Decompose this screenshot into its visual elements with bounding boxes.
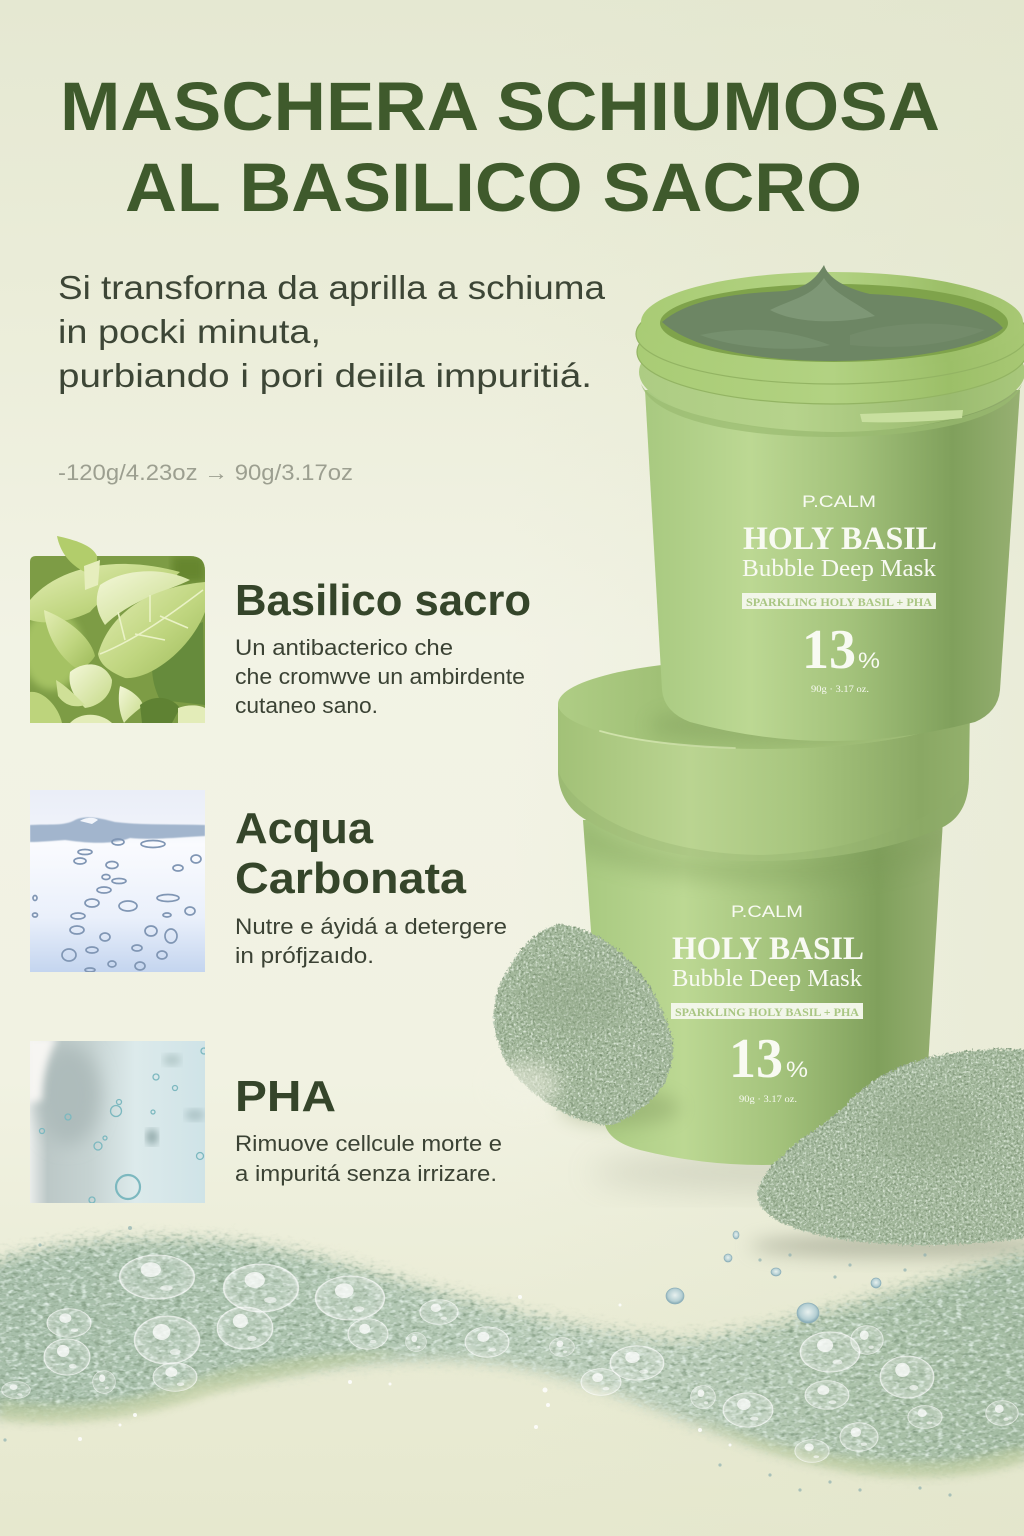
- collar highlight: [860, 410, 963, 422]
- bottom jar body: [583, 820, 943, 1165]
- description: Basilico sacro: [235, 635, 525, 718]
- title: [60, 68, 940, 226]
- heading: Basilico sacro: Basilico sacro: [235, 576, 531, 625]
- right foam pile: [758, 1049, 1024, 1245]
- weight note: -120g/4.23oz → 90g/3.17oz: [58, 460, 353, 485]
- bottom jar label: P.CALM: [731, 902, 803, 921]
- bottom jar label: %: [786, 1057, 808, 1082]
- top jar: [636, 265, 1024, 741]
- shadow under bottom jar: [590, 1156, 950, 1188]
- thumbnail: PHA texture: [25, 1036, 207, 1203]
- top jar label: [742, 492, 937, 695]
- top jar collar: [639, 312, 1024, 432]
- description: Basilico sacro: che cromwve un ambirdente: [235, 664, 525, 689]
- left foam blob: [491, 924, 673, 1125]
- thumbnail: holy basil leaves: [22, 536, 205, 723]
- description: Acqua Carbonata: Nutre e áyidá a detergere: [235, 914, 507, 939]
- description: PHA: a impuritá senza irrizare.: [235, 1161, 497, 1186]
- heading: Acqua Carbonata: Acqua: [235, 804, 374, 853]
- description: PHA: [235, 1131, 502, 1186]
- bottom jar: [558, 659, 970, 1165]
- thumbnail: carbonated water: [30, 790, 205, 972]
- bottom jar label: Bubble Deep Mask: [672, 966, 862, 992]
- description: Basilico sacro: Un antibacterico che: [235, 635, 453, 660]
- top jar body: [645, 390, 1020, 741]
- foam droplets: [78, 1295, 732, 1446]
- bottom jar label: HOLY BASIL: [672, 931, 864, 967]
- description: Acqua Carbonata: in prófjzaıdo.: [235, 943, 374, 968]
- subtitle: [58, 269, 606, 394]
- yellow-green foam underside: [0, 1352, 1024, 1477]
- description: Basilico sacro: cutaneo sano.: [235, 693, 378, 718]
- bottom jar label: 90g · 3.17 oz.: [739, 1095, 797, 1105]
- mask cream: [662, 265, 1003, 361]
- large bubbles: [2, 1255, 1018, 1463]
- bottom jar label: SPARKLING HOLY BASIL + PHA: [675, 1005, 859, 1019]
- water drops: [666, 1231, 881, 1323]
- top jar label: 90g · 3.17 oz.: [811, 685, 869, 695]
- top jar label: SPARKLING HOLY BASIL + PHA: [746, 595, 932, 609]
- shadow of top jar on lid: [660, 714, 914, 748]
- heading: PHA: PHA: [235, 1072, 336, 1121]
- title: AL BASILICO SACRO: [125, 149, 862, 226]
- top jar label: %: [858, 648, 880, 673]
- top jar inner wall: [660, 284, 1008, 362]
- description: Acqua Carbonata: [235, 914, 507, 968]
- top jar label: Bubble Deep Mask: [742, 556, 936, 582]
- top jar label: P.CALM: [802, 492, 876, 511]
- subtitle: purbiando i pori deiila impuritiá.: [58, 357, 592, 394]
- bottom jar label: [671, 902, 864, 1105]
- subtitle: Si transforna da aprilla a schiuma: [58, 269, 606, 306]
- top jar label: 13: [802, 619, 856, 681]
- top jar thread rings: [637, 300, 1024, 404]
- description: PHA: Rimuove cellcule morte e: [235, 1131, 502, 1156]
- heading: Acqua Carbonata: [235, 804, 467, 903]
- shadow under right foam: [750, 1234, 1024, 1258]
- bottom jar label: 13: [729, 1028, 783, 1090]
- top jar rim: [641, 272, 1023, 372]
- subtitle: in pocki minuta,: [58, 313, 321, 350]
- title: MASCHERA SCHIUMOSA: [60, 68, 940, 145]
- top jar label: HOLY BASIL: [743, 521, 937, 557]
- shadow under left foam: [560, 1090, 680, 1126]
- heading: Acqua Carbonata: Carbonata: [235, 854, 467, 903]
- bottom jar lid: [558, 659, 970, 861]
- lid shadow on jar: [583, 822, 942, 884]
- foam wave: [0, 1226, 1024, 1497]
